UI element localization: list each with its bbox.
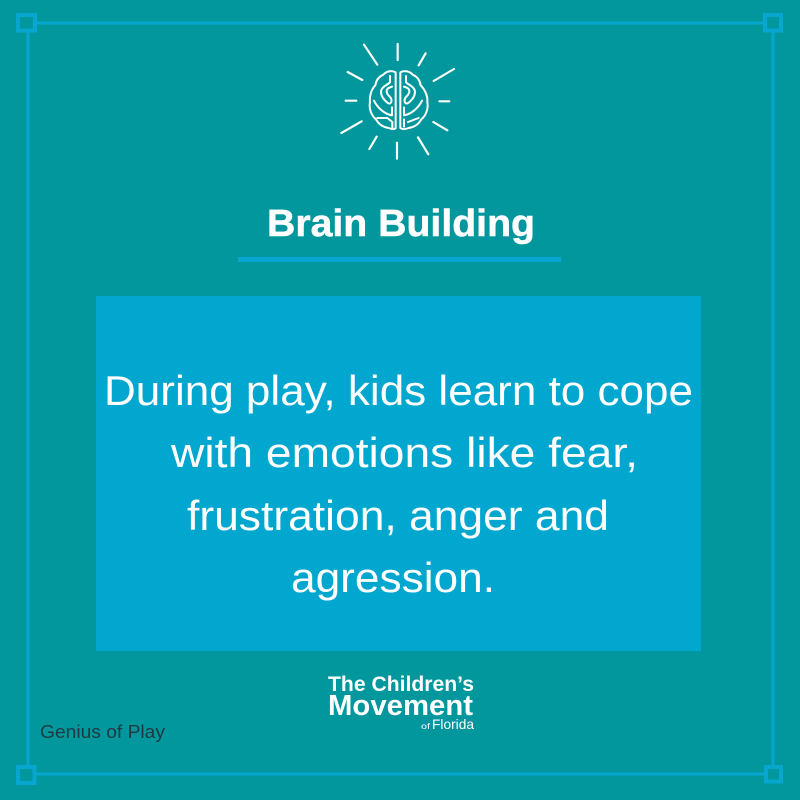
panel: message box [96, 296, 701, 651]
heading underline [238, 257, 561, 262]
logo: The Children's Movement of Florida: Movement [328, 690, 473, 722]
message text: agression. [291, 554, 495, 601]
logo: The Children's Movement of Florida [328, 673, 474, 732]
icon: brain outline and folds [370, 71, 428, 129]
message text: frustration, anger and [187, 492, 609, 539]
message text: During play, kids learn to cope [104, 367, 693, 414]
source credit: Genius of Play [40, 721, 166, 742]
icon: glowing brain [341, 44, 454, 159]
message text [104, 367, 693, 601]
logo: The Children's Movement of Florida: of [421, 722, 431, 731]
heading: Brain Building [267, 203, 535, 245]
message text: with emotions like fear, [170, 429, 638, 476]
icon: light rays [341, 44, 454, 159]
logo: The Children's Movement of Florida: Florida [432, 716, 474, 732]
logo: The Children's Movement of Florida: The Children’s [328, 673, 474, 696]
